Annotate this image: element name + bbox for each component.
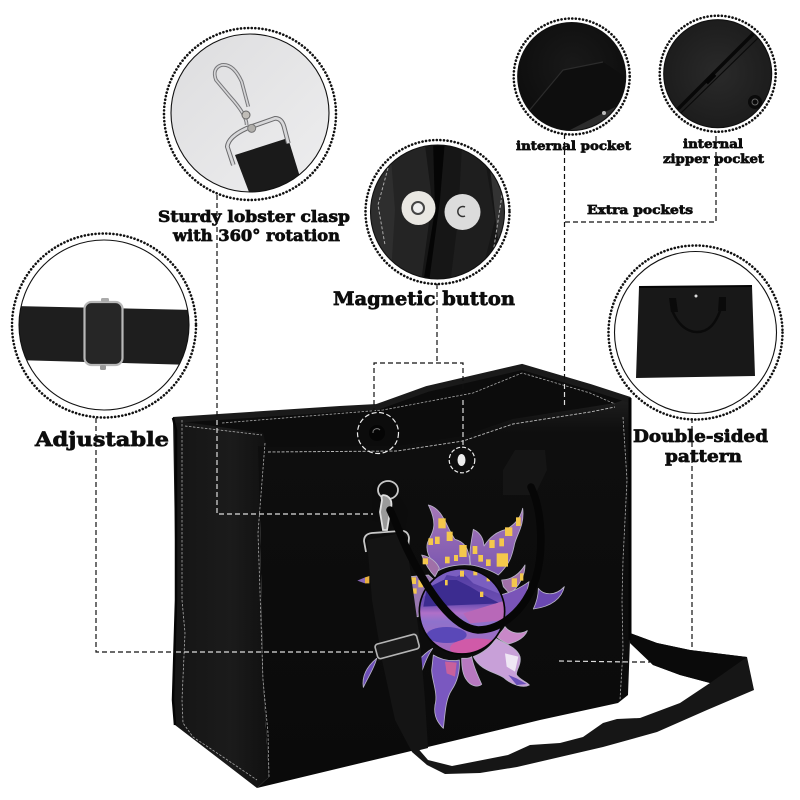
panel: double-sided bag detail [608, 246, 782, 420]
centre disc [419, 569, 505, 654]
bag body [173, 365, 630, 788]
callout line: double-sided [559, 418, 692, 662]
heading: internal zipper pocket [663, 136, 764, 166]
heading: internal pocket: internal pocket [516, 138, 631, 153]
heading: internal zipper pocket: zipper pocket [663, 151, 764, 166]
heading: extra pockets: Extra pockets [587, 202, 693, 217]
heading: sturdy lobster clasp: with 360° rotation [172, 226, 340, 245]
icon: magnet discs [402, 191, 480, 230]
heading: adjustable: Adjustable [34, 427, 169, 451]
sun emblem [357, 505, 564, 728]
heading: double-sided pattern: pattern [665, 447, 742, 466]
panel: lobster clasp detail [160, 25, 340, 205]
callout line: clasp [217, 195, 373, 514]
icon: lobster clasp [215, 65, 288, 165]
callout line: extra pockets [564, 132, 716, 407]
icon: flat bag back view [636, 286, 755, 378]
bag interior [173, 365, 630, 458]
icon: slider buckle [84, 298, 122, 370]
callout line: magnetic button [358, 284, 475, 473]
bag front panel [257, 398, 630, 788]
panel: internal zipper pocket detail [660, 15, 776, 132]
heading: sturdy lobster clasp: Sturdy lobster clasp [158, 207, 350, 226]
carry handle [390, 450, 547, 630]
callout line: adjustable [96, 418, 373, 652]
panel: magnetic button detail [365, 140, 512, 290]
panel: internal pocket detail [514, 18, 630, 135]
heading: double-sided pattern [633, 427, 769, 466]
bag snap buttons [369, 425, 466, 466]
panel: adjustable strap detail [12, 234, 196, 418]
back rim [173, 367, 630, 420]
lanterns [411, 517, 523, 617]
heading: sturdy lobster clasp [158, 207, 350, 245]
strap clasp on bag [364, 480, 409, 552]
front strap with slider [367, 532, 428, 752]
shoulder strap loop [412, 633, 754, 774]
heading: internal zipper pocket: internal [683, 136, 743, 151]
bag side panel [173, 418, 269, 788]
heading: magnetic button: Magnetic button [333, 288, 515, 310]
heading: double-sided pattern: Double-sided [633, 427, 769, 446]
